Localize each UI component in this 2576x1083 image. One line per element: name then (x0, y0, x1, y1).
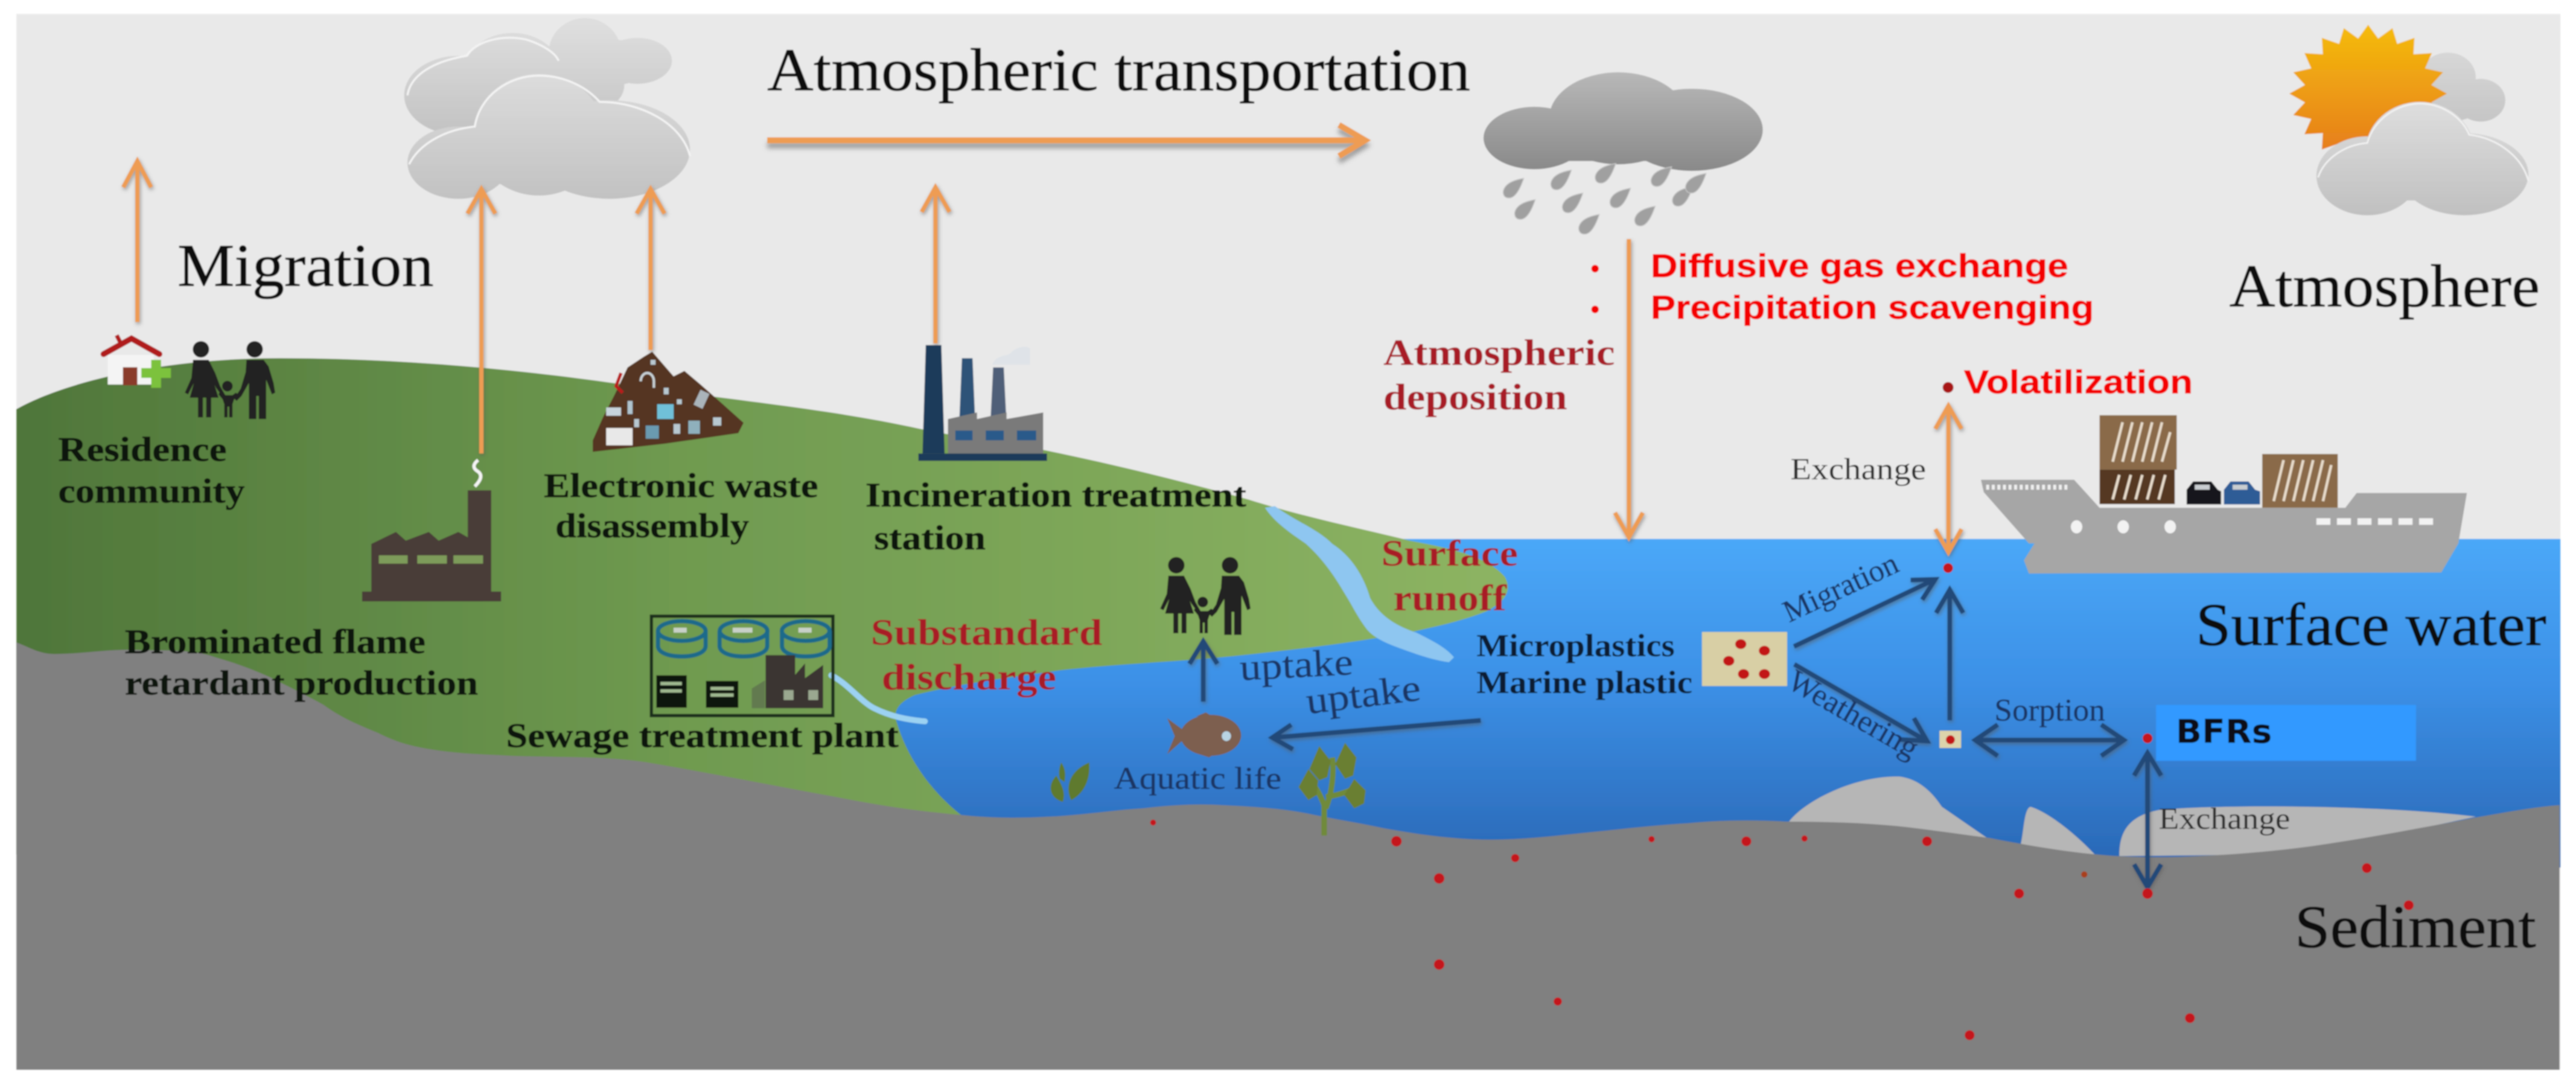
arrow: residence upward (123, 161, 151, 322)
panel: land (16, 358, 1508, 854)
list: atmospheric deposition mechanisms (1591, 248, 2094, 326)
label: Electronic waste disassembly (544, 467, 818, 545)
arrow: atmospheric deposition (1615, 239, 1643, 537)
label: Microplastics Marine plastic: Microplastics (1476, 628, 1675, 663)
icon: cloud over Migration (404, 18, 690, 199)
icon: fish (1167, 712, 1241, 758)
arrow: electronic waste upward (637, 189, 665, 350)
label: Sewage treatment plant: Sewage treatment plant (506, 717, 899, 755)
icon: microplastic with BFR (1940, 730, 1961, 748)
label: Aquatic life: Aquatic life (1114, 762, 1281, 796)
heading: Surface water: Surface water (2196, 590, 2546, 658)
label: Electronic waste disassembly: Electronic waste (544, 467, 818, 505)
label: Surface runoff: runoff (1393, 578, 1507, 619)
river: surface runoff (1265, 506, 1454, 662)
arrow: uptake fish to humans (1190, 641, 1217, 701)
label: Sorption: Sorption (1994, 693, 2105, 727)
label: Atmospheric deposition (1383, 332, 1615, 418)
label: Brominated flame retardant production (125, 623, 478, 703)
arrow: migration from plastic to water (1794, 580, 1935, 647)
label: Surface runoff: Surface (1381, 533, 1518, 574)
label: Exchange air-water: Exchange (1790, 452, 1926, 486)
label: Exchange water-sediment: Exchange (2159, 802, 2290, 835)
legend: BFRs box (2156, 705, 2416, 761)
icon: residence house (104, 335, 171, 388)
arrow: incineration upward (922, 187, 949, 343)
legend: BFRs box: BFRs (2176, 712, 2272, 750)
heading: Migration: Migration (177, 232, 434, 299)
river: sewage discharge (831, 676, 925, 721)
icon: aquatic tree (1298, 743, 1366, 835)
label: Incineration treatment station (866, 476, 1246, 557)
panel: sediment (16, 642, 2560, 1070)
arrow: atmospheric transportation (767, 125, 1365, 156)
title: Atmospheric transportation: Atmospheric transportation (767, 36, 1470, 104)
icon: electronic waste pile (593, 351, 744, 452)
light sediment mounds (1789, 776, 2476, 856)
label: Substandard discharge: discharge (882, 657, 1056, 698)
list: atmospheric deposition mechanisms: Diffusive gas exchange (1651, 248, 2068, 284)
label: Substandard discharge (871, 612, 1102, 698)
label: Surface runoff (1381, 533, 1518, 619)
label: Microplastics Marine plastic (1476, 628, 1692, 700)
icon: rain cloud (1484, 72, 1763, 234)
list: atmospheric deposition mechanisms: Precipitation scavenging (1651, 289, 2094, 326)
arrow: exchange water-sediment (2134, 753, 2161, 887)
label: Microplastics Marine plastic: Marine plastic (1476, 665, 1692, 700)
label: uptake to aquatic life: uptake (1304, 666, 1423, 723)
label: Incineration treatment station: Incineration treatment (866, 476, 1246, 514)
label: Atmospheric deposition: Atmospheric (1383, 332, 1615, 373)
label: Weathering: Weathering (1782, 663, 1925, 765)
icon: sun and cloud (2289, 25, 2528, 216)
icon: flame retardant factory (362, 460, 501, 601)
icon: incineration station (919, 345, 1047, 461)
label: Migration in water: Migration (1777, 546, 1904, 629)
label: uptake to humans: uptake (1239, 641, 1354, 689)
heading: Atmosphere: Atmosphere (2230, 252, 2540, 320)
label: Residence community: community (58, 472, 245, 510)
arrow: sorption two-way (1975, 724, 2124, 756)
label: Substandard discharge: Substandard (871, 612, 1102, 653)
arrow: flame retardant factory upward (467, 189, 496, 453)
arrow: exchange up and down (1935, 406, 1962, 552)
icon: marine plastic with BFRs (1702, 632, 1787, 686)
label: Atmospheric deposition: deposition (1383, 377, 1567, 418)
icon: sewage treatment plant (651, 616, 833, 715)
label: Electronic waste disassembly: disassembly (555, 507, 750, 545)
label: Brominated flame retardant production: retardant production (125, 665, 478, 703)
label: Residence community: Residence (58, 430, 227, 468)
arrow: weathering to microplastic (1794, 664, 1927, 741)
label: Volatilization: Volatilization (1964, 364, 2193, 401)
arrow: uptake plastics to aquatic life (1272, 720, 1481, 749)
label: Residence community (58, 430, 245, 510)
icon: aquatic plant left (1051, 762, 1089, 802)
label: Brominated flame retardant production: Brominated flame (125, 623, 426, 661)
panel: surface water (821, 539, 2560, 867)
label: Incineration treatment station: station (874, 519, 986, 557)
icon: family uptake (1160, 557, 1251, 635)
icon: family at residence (185, 341, 275, 419)
BFR particles in water and sediment (1150, 563, 2414, 1040)
icon: cargo ship (1981, 415, 2467, 573)
heading: Sediment: Sediment (2295, 893, 2536, 960)
arrow: microplastic up (1936, 590, 1963, 720)
